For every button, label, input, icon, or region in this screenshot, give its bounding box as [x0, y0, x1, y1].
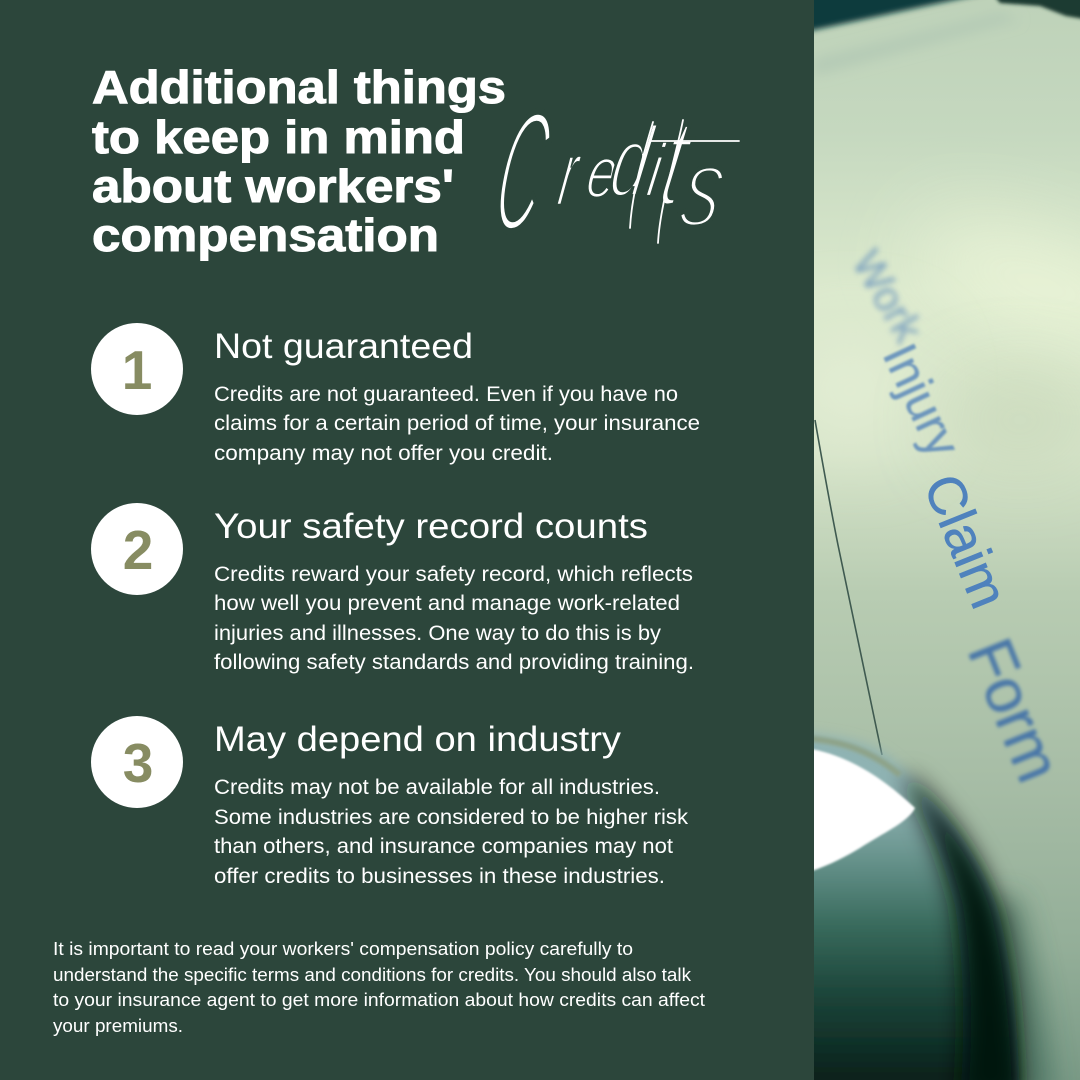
title [92, 61, 506, 261]
body 1 [214, 383, 700, 465]
body 3: offer credits to businesses in these industries. [214, 865, 665, 888]
badge 2 [91, 503, 183, 595]
dark top corners [814, 0, 1080, 70]
title: Additional things [92, 61, 506, 113]
panel: dark green background [0, 0, 814, 1080]
section 1: not guaranteed [91, 323, 700, 465]
body 3: Some industries are considered to be higher risk [214, 806, 689, 829]
badge 3: 3 [123, 732, 153, 794]
paper fold line [815, 420, 882, 755]
title: to keep in mind [92, 111, 465, 163]
heading 1: Not guaranteed [214, 327, 473, 366]
section 2: your safety record counts [91, 503, 694, 674]
script word: Credits: r [552, 121, 588, 225]
script word: Credits: s [673, 125, 735, 250]
heading 2: Your safety record counts [214, 507, 648, 546]
form text: Form [954, 629, 1074, 792]
footer note: It is important to read your workers' compensation policy carefully to [53, 938, 633, 959]
footer note: your premiums. [53, 1015, 183, 1036]
script word: Credits: d [603, 106, 661, 218]
body 2: how well you prevent and manage work-related [214, 592, 680, 615]
footer note [53, 938, 705, 1036]
footer note: to your insurance agent to get more information about how credits can affect [53, 989, 705, 1010]
script word: Credits: t [651, 92, 702, 232]
badge 1: 1 [122, 339, 152, 401]
script word: Credits [484, 78, 739, 267]
body 2: Credits reward your safety record, which reflects [214, 563, 693, 586]
heading 3: May depend on industry [214, 720, 622, 759]
body 2 [214, 563, 694, 674]
body 3 [214, 776, 689, 888]
badge 3 [91, 716, 183, 808]
light on paper [820, 215, 1080, 423]
form text: Injury [872, 336, 970, 465]
form text: Claim [912, 466, 1019, 616]
body 2: following safety standards and providing training. [214, 651, 694, 674]
badge 2: 2 [123, 519, 153, 581]
dark orb [800, 734, 1034, 1080]
body 3: Credits may not be available for all industries. [214, 776, 660, 799]
body 1: claims for a certain period of time, your insurance [214, 412, 700, 435]
body 1: Credits are not guaranteed. Even if you have no [214, 383, 678, 406]
badge 1 [91, 323, 183, 415]
script word: Credits: e [581, 133, 624, 213]
body 3: than others, and insurance companies may not [214, 835, 673, 858]
script word: Credits: C [484, 78, 562, 267]
body 1: company may not offer you credit. [214, 442, 553, 465]
body 2: injuries and illnesses. One way to do this is by [214, 622, 662, 645]
form text [843, 242, 1074, 792]
title: compensation [92, 209, 439, 261]
title: about workers' [92, 160, 454, 212]
photo: work injury claim form [790, 0, 1080, 1080]
section 3: may depend on industry [91, 716, 689, 888]
script word: Credits: i [642, 128, 670, 212]
form text: Work [843, 242, 933, 351]
footer note: understand the specific terms and conditions for credits. You should also talk [53, 964, 692, 985]
